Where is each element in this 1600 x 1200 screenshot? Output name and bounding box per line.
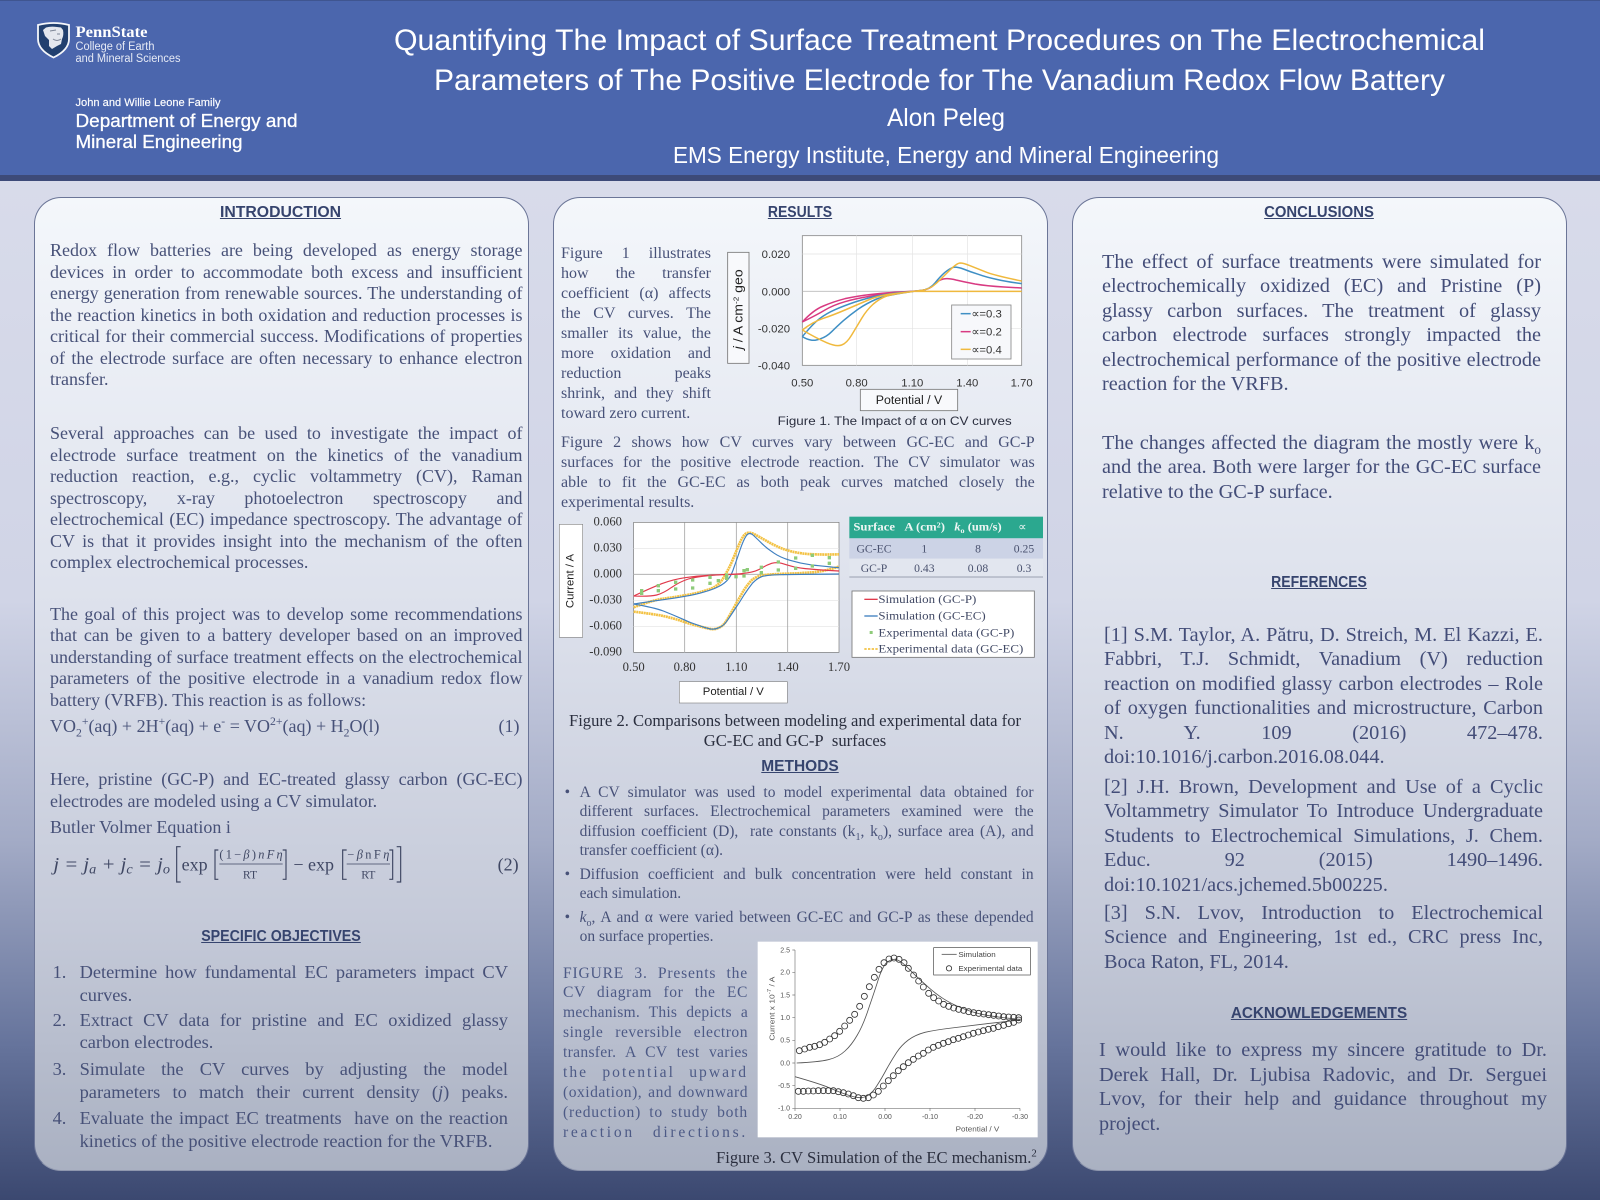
objective 1: Determine how fundamental EC parameters impact CV <box>80 962 508 982</box>
experimental circles <box>795 955 1022 1101</box>
curve: alpha 0.4 <box>802 263 1022 346</box>
chart: figure 2 model vs experiment <box>559 514 850 704</box>
axis tick labels: -0.020 <box>758 323 790 335</box>
equation 2: Butler Volmer: j = j <box>53 855 87 876</box>
axis tick labels: 1.40 <box>956 378 978 390</box>
intro paragraph 3 <box>50 604 522 710</box>
figure 3 caption: Figure 3. CV Simulation of the EC mechanism.2 <box>716 1147 1037 1167</box>
icon: Penn State shield logo <box>37 22 70 58</box>
conclusions paragraph 1 <box>1102 251 1541 395</box>
curve: alpha 0.3 <box>802 267 1022 340</box>
reference 3: [3] S.N. Lvov, Introduction to Electrochemical <box>1104 902 1543 924</box>
table: fitted parameters: 1 <box>921 543 927 556</box>
x axis label: Potential / V <box>703 686 764 698</box>
figure 1 description: how the transfer <box>561 265 711 282</box>
table: fitted parameters: 2 <box>937 520 941 529</box>
objective 3: Simulate the CV curves by adjusting the model <box>80 1059 508 1079</box>
x axis label: Potential / V <box>876 393 943 407</box>
figure 3 description: (oxidation), and downward <box>563 1084 748 1101</box>
conclusions paragraph 1: The effect of surface treatments were simulated for <box>1102 251 1541 273</box>
reference 1: Fabbri, T.J. Schmidt, Vanadium (V) reduction <box>1104 648 1543 670</box>
table: fitted parameters: k <box>954 522 961 534</box>
reference 3 <box>1104 902 1543 973</box>
x axis label <box>860 389 958 411</box>
reference 2: [2] J.H. Brown, Development and Use of a Cyclic <box>1104 776 1543 798</box>
y axis label: geo <box>732 269 746 297</box>
figure 3 description: transfer. A CV test varies <box>563 1044 748 1061</box>
equation 2: Butler Volmer: = j <box>133 855 163 876</box>
figure 1 description: coefficient (α) affects <box>561 285 711 302</box>
figure 1 description: reduction peaks <box>561 365 711 382</box>
text: 2. <box>53 1010 66 1030</box>
y axis label <box>728 252 749 363</box>
figure 1 description: shrink, and they shift <box>561 385 711 402</box>
table: fitted parameters: GC-P <box>861 562 888 575</box>
legend: figure 2: Experimental data (GC-EC) <box>878 644 1024 656</box>
title and author block <box>394 24 1485 168</box>
axis labels: 0.10 <box>833 1114 847 1121</box>
figure 2 description: Figure 2 shows how CV curves vary between GC-EC and GC-P <box>561 434 1035 450</box>
chart: figure 3 CV simulation <box>758 942 1038 1138</box>
legend: Experimental data <box>958 964 1023 973</box>
legend: figure 2: Experimental data (GC-P) <box>878 627 1015 639</box>
axis labels: -0.10 <box>922 1114 938 1121</box>
objectives list: carbon electrodes. <box>80 1032 213 1052</box>
title and author block: Quantifying The Impact of Surface Treatment Procedures on The Electrochemical <box>394 24 1485 57</box>
header banner <box>0 0 1600 181</box>
reference 2: Students to Electrochemical Simulations, J. Chem. <box>1104 824 1543 846</box>
equation 2: Butler Volmer: exp <box>182 855 208 875</box>
axis labels: -1.0 <box>778 1106 790 1113</box>
axis tick labels: -0.030 <box>589 593 622 607</box>
axis tick labels: 1.70 <box>828 660 850 674</box>
y axis label: Current / A <box>564 553 576 608</box>
reference 1: reaction on modified glassy carbon electrodes – Role <box>1104 672 1543 694</box>
axis tick labels: 1.10 <box>901 378 923 390</box>
figure 1 description: the CV curves. The <box>561 305 711 322</box>
table: fitted parameters: 0.08 <box>968 562 988 575</box>
acknowledgements text: Derek Hall, Dr. Ljubisa Radovic, and Dr. Serguei <box>1099 1064 1547 1086</box>
reference 1: [1] S.M. Taylor, A. Pătru, D. Streich, M. El Kazzi, E. <box>1104 624 1543 646</box>
figure 3 description: CV diagram for the EC <box>563 984 748 1001</box>
methods bullet list: on surface properties. <box>580 928 713 945</box>
axis tick labels: 0.030 <box>594 541 622 555</box>
figure 2 caption: GC-EC and GC-P surfaces <box>704 731 886 750</box>
acknowledgements text: Lvov, for their help and guidance throughout my <box>1099 1088 1547 1110</box>
header logo text: and Mineral Sciences <box>76 53 181 65</box>
conclusions paragraph 1: electrochemical performance of the positive electrode <box>1102 349 1541 371</box>
reference 1 <box>1104 624 1543 768</box>
intro paragraph 2: electrode surface treatment on the kinetics of the vanadium <box>50 444 522 464</box>
header logo text <box>76 24 298 152</box>
figure 1 description: more oxidation and <box>561 345 711 362</box>
axis tick labels: 1.10 <box>725 660 747 674</box>
intro paragraph 3: that can be given to a battery developer based on an improved <box>50 625 522 645</box>
curve: alpha 0.2 <box>802 279 1022 322</box>
figure 3 description <box>563 964 748 1141</box>
panel: results background <box>552 197 1048 1171</box>
intro paragraph 1: Redox flow batteries are being developed as energy storage <box>50 240 522 260</box>
table: fitted parameters: A (cm <box>904 522 933 534</box>
data: experimental GC-EC <box>634 533 839 629</box>
heading: results: RESULTS <box>768 204 832 221</box>
legend: alpha values: ∝=0.3 <box>971 309 1002 321</box>
figure 3 description: FIGURE 3. Presents the <box>563 964 748 982</box>
axis tick labels: 1.40 <box>777 660 799 674</box>
figure 1 caption: Figure 1. The Impact of α on CV curves <box>778 414 1012 428</box>
table: fitted parameters: o <box>961 526 965 535</box>
table: fitted parameters: (um/s) <box>965 522 1002 534</box>
heading: references: REFERENCES <box>1271 574 1367 591</box>
text: • <box>565 909 570 926</box>
intro paragraph 2: reduction reaction, e.g., cyclic voltammetry (CV), Raman <box>50 466 522 486</box>
legend <box>934 948 1030 975</box>
figure 1 description <box>561 245 711 422</box>
conclusions paragraph 1: carbon electrode surfaces strongly impacted the <box>1102 324 1541 346</box>
equation 2: Butler Volmer: (2) <box>498 855 519 876</box>
intro paragraph 1: energy generation from renewable sources. The understanding of <box>50 283 522 303</box>
figure 2 caption: Figure 2. Comparisons between modeling and experimental data for <box>569 711 1021 730</box>
reference 2: doi:10.1021/acs.jchemed.5b00225. <box>1104 874 1388 896</box>
axis labels: Current x 10 <box>767 1000 776 1041</box>
axis tick labels <box>589 514 850 674</box>
legend: figure 2: Simulation (GC-EC) <box>878 611 986 623</box>
axis tick labels: 0.000 <box>762 286 790 298</box>
data: simulation GC-EC <box>634 533 839 629</box>
table: fitted parameters <box>849 516 1043 578</box>
reference 1: of oxygen functionalities and microstructure, Carbon <box>1104 697 1543 719</box>
intro paragraph 1 <box>50 240 522 389</box>
axis labels: 0.00 <box>878 1114 892 1121</box>
figure 3 description: (reduction) to study both <box>563 1104 748 1121</box>
conclusions paragraph 1: glassy carbon surfaces. The treatment of glassy <box>1102 300 1541 322</box>
legend: alpha values <box>952 305 1011 359</box>
figure 2 description <box>561 434 1035 511</box>
intro paragraph 1: critical for their commercial success. Modifications of properties <box>50 326 522 346</box>
legend: figure 2 <box>852 590 1035 658</box>
axis labels: 0.0 <box>780 1060 790 1067</box>
reference 2: Voltammetry Simulator To Introduce Undergraduate <box>1104 800 1543 822</box>
header logo text: PennState <box>76 24 148 41</box>
conclusions paragraph 2: and the area. Both were larger for the GC-EC surface <box>1102 456 1541 478</box>
figure 3 description: reaction directions. <box>563 1124 748 1141</box>
objectives list: curves. <box>80 985 132 1005</box>
acknowledgements text: project. <box>1099 1112 1160 1134</box>
title and author block: EMS Energy Institute, Energy and Mineral Engineering <box>673 142 1219 168</box>
objectives list: parameters to match their current density (j) peaks. <box>80 1082 508 1102</box>
legend: figure 2: Simulation (GC-P) <box>878 594 977 606</box>
heading: introduction: INTRODUCTION <box>220 204 341 221</box>
conclusions paragraph 1: electrochemically oxidized (EC) and Pristine (P) <box>1102 275 1541 297</box>
axis labels <box>767 947 1028 1134</box>
axis labels: Potential / V <box>956 1125 1000 1134</box>
y axis label: -2 <box>732 297 741 304</box>
intro paragraph 4: Here, pristine (GC-P) and EC-treated glassy carbon (GC-EC) <box>50 769 522 789</box>
figure 2 description: able to fit the GC-EC as both peak curves matched closely the <box>561 474 1035 491</box>
methods bullet list: each simulation. <box>580 885 681 902</box>
heading: acknowledgements: ACKNOWLEDGEMENTS <box>1231 1005 1407 1022</box>
table: fitted parameters: 0.43 <box>914 562 935 575</box>
intro paragraph 2: complex electrochemical processes. <box>50 552 308 572</box>
acknowledgements text <box>1099 1039 1547 1134</box>
figure 1 description: smaller its value, the <box>561 325 711 342</box>
axis labels: 0.5 <box>780 1038 790 1045</box>
data: experimental GC-P <box>640 554 831 595</box>
axis labels: -0.30 <box>1012 1114 1028 1121</box>
figure 2 description: experimental results. <box>561 494 694 511</box>
equation 2: Butler Volmer: −βnFη <box>347 848 389 862</box>
bullet 3: ko, A and α were varied between GC-EC and GC-P as these depended <box>580 909 1034 929</box>
axis tick labels <box>758 249 1033 390</box>
axis labels: / A <box>767 977 776 989</box>
equation 2: Butler Volmer: c <box>126 861 133 876</box>
equation 2: Butler Volmer: a <box>89 861 97 876</box>
panel: conclusions background <box>1072 197 1567 1171</box>
reference 1: doi:10.1016/j.carbon.2016.08.044. <box>1104 746 1385 768</box>
figure 3 description: single reversible electron <box>563 1024 748 1041</box>
axis labels: 2.0 <box>780 970 790 977</box>
heading: specific objectives: SPECIFIC OBJECTIVES <box>201 928 360 945</box>
bullet 2: Diffusion coefficient and bulk concentration were held constant in <box>580 866 1034 883</box>
axis tick labels: -0.090 <box>589 645 622 659</box>
figure 2 caption <box>569 711 1021 750</box>
legend: alpha values: ∝=0.4 <box>971 344 1002 356</box>
objectives list: kinetics of the positive electrode reaction for the VRFB. <box>80 1131 492 1151</box>
table: fitted parameters: ∝ <box>1018 522 1026 534</box>
table: fitted parameters: GC-EC <box>857 543 892 556</box>
y axis label <box>559 524 583 637</box>
methods bullet list: diffusion coefficient (D), rate constants (k1, ko), surface area (A), and <box>580 823 1034 843</box>
intro paragraph 3: The goal of this project was to develop some recommendations <box>50 604 522 624</box>
equation 2: Butler Volmer: − exp <box>293 855 334 875</box>
text: • <box>565 784 570 801</box>
acknowledgements text: I would like to express my sincere gratitude to Dr. <box>1099 1039 1547 1061</box>
table: fitted parameters: 8 <box>975 543 981 556</box>
legend: alpha values: ∝=0.2 <box>971 327 1002 339</box>
table: fitted parameters: Surface <box>853 522 895 534</box>
objectives list <box>53 962 508 1151</box>
figure 3 description: the potential upward <box>563 1064 748 1081</box>
table: fitted parameters: ) <box>941 522 945 534</box>
figure 2 description: surfaces for the positive electrode reaction. The CV simulator was <box>561 454 1035 471</box>
intro paragraph 4: electrodes are modeled using a CV simulator. <box>50 791 377 811</box>
reference 3: Boca Raton, FL, 2014. <box>1104 951 1289 973</box>
data: simulation GC-P <box>634 563 839 596</box>
axis tick labels: 0.50 <box>791 378 813 390</box>
heading: conclusions: CONCLUSIONS <box>1264 204 1374 221</box>
conclusions paragraph 2: relative to the GC-P surface. <box>1102 480 1333 502</box>
table: fitted parameters: 0.25 <box>1014 543 1034 556</box>
axis labels: 0.20 <box>788 1114 802 1121</box>
reference 2: Educ. 92 (2015) 1490–1496. <box>1104 849 1543 871</box>
legend: Simulation <box>958 950 996 959</box>
axis tick labels: 0.060 <box>594 514 622 528</box>
intro paragraph 4 <box>50 769 522 837</box>
intro paragraph 1: devices in order to accommodate both excess and insufficient <box>50 262 522 282</box>
intro paragraph 2: Several approaches can be used to investigate the impact of <box>50 423 522 443</box>
axis tick labels: -0.040 <box>758 360 790 372</box>
methods bullet list: transfer coefficient (α). <box>580 842 723 859</box>
methods bullet list <box>565 784 1034 945</box>
title and author block: Alon Peleg <box>887 104 1005 132</box>
intro paragraph 2: spectroscopy, x-ray photoelectron spectroscopy and <box>50 488 522 508</box>
axis tick labels: 0.000 <box>594 567 622 581</box>
intro paragraph 3: battery (VRFB). This reaction is as follows: <box>50 690 366 710</box>
equation 2: Butler Volmer: RT <box>243 869 257 882</box>
axis labels: 1.0 <box>780 1015 790 1022</box>
conclusions paragraph 2: The changes affected the diagram the mostly were ko <box>1102 432 1541 457</box>
intro paragraph 3: parameters of the positive electrode in a vanadium redox flow <box>50 668 522 688</box>
text: 1. <box>53 962 66 982</box>
text: • <box>565 866 570 883</box>
axis tick labels: 0.020 <box>762 249 790 261</box>
intro paragraph 1: of the electrode surface are often necessary to enhance electron <box>50 348 522 368</box>
conclusions paragraph 2 <box>1102 432 1541 502</box>
equation 2: Butler Volmer: RT <box>361 869 375 882</box>
equation 1: VO2+(aq) + 2H+(aq) + e- = VO2+(aq) + H2O(l) <box>50 715 379 740</box>
methods bullet list: different surfaces. Electrochemical parameters examined were the <box>580 803 1034 820</box>
axis tick labels: 0.80 <box>674 660 696 674</box>
figure 1 description: toward zero current. <box>561 405 690 422</box>
equation 2: Butler Volmer: o <box>163 861 170 876</box>
equation 1: (1) <box>498 716 520 736</box>
simulation line <box>795 959 1020 1098</box>
header logo text: Mineral Engineering <box>76 131 242 152</box>
axis tick labels: 0.80 <box>846 378 868 390</box>
axis labels: -0.20 <box>967 1114 983 1121</box>
panel: introduction background <box>34 197 529 1171</box>
equation 2: Butler Volmer: + j <box>96 855 126 876</box>
intro paragraph 3: understanding of surface treatment effects on the electrochemical <box>50 647 522 667</box>
reference 1: N. Y. 109 (2016) 472–478. <box>1104 722 1543 744</box>
heading: methods: METHODS <box>761 758 839 775</box>
axis tick labels: -0.060 <box>589 619 622 633</box>
header logo text: College of Earth <box>76 41 154 53</box>
intro paragraph 1: the reaction kinetics in both oxidation and reduction processes is <box>50 305 522 325</box>
table: fitted parameters: 0.3 <box>1017 562 1031 575</box>
bullet 1: A CV simulator was used to model experimental data obtained for <box>580 784 1034 801</box>
text: 3. <box>53 1059 66 1079</box>
axis tick labels: 1.70 <box>1011 378 1033 390</box>
intro paragraph 1: transfer. <box>50 369 108 389</box>
objective 2: Extract CV data for pristine and EC oxidized glassy <box>80 1010 508 1030</box>
text: 4. <box>53 1108 66 1128</box>
reference 2 <box>1104 776 1543 896</box>
y axis label: j / A cm <box>732 308 746 349</box>
conclusions paragraph 1: reaction for the VRFB. <box>1102 373 1289 395</box>
axis labels: 2.5 <box>780 947 790 954</box>
equation 2: Butler Volmer <box>51 846 519 883</box>
objective 4: Evaluate the impact EC treatments have on the reaction <box>80 1108 508 1128</box>
header logo text: John and Willie Leone Family <box>76 97 221 109</box>
header logo text: Department of Energy and <box>76 110 298 131</box>
axis tick labels: 0.50 <box>623 660 645 674</box>
title and author block: Parameters of The Positive Electrode for The Vanadium Redox Flow Battery <box>434 64 1445 97</box>
figure 1 description: Figure 1 illustrates <box>561 245 711 262</box>
axis labels: -0.5 <box>778 1083 790 1090</box>
chart: figure 1 CV curves <box>727 235 1033 428</box>
intro paragraph 2: CV is that it provides insight into the mechanism of the often <box>50 530 522 550</box>
axis labels: -7 <box>767 989 773 994</box>
equation 2: Butler Volmer: (1−β)nFη <box>219 848 283 862</box>
intro paragraph 4: Butler Volmer Equation i <box>50 817 231 837</box>
axis labels: 1.5 <box>780 992 790 999</box>
intro paragraph 2: electrochemical (EC) impedance spectroscopy. The advantage of <box>50 509 522 529</box>
x axis label <box>679 682 787 703</box>
reference 3: Science and Engineering, 1st ed., CRC press Inc, <box>1104 926 1543 948</box>
figure 3 description: mechanism. This depicts a <box>563 1004 748 1021</box>
intro paragraph 2 <box>50 423 522 572</box>
